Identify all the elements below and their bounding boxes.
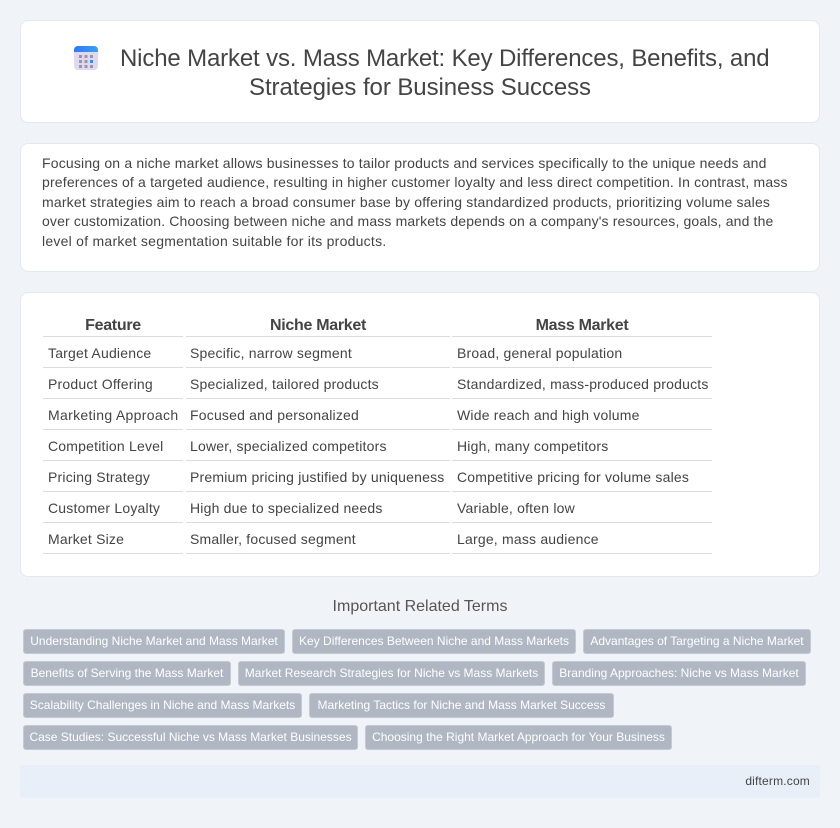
related term tags: Key Differences Between Niche and Mass Markets <box>299 634 569 648</box>
related term tags: Advantages of Targeting a Niche Market <box>590 634 804 648</box>
comparison table: Target Audience <box>48 345 151 361</box>
comparison table: Product Offering <box>48 376 153 392</box>
comparison table: Specific, narrow segment <box>190 345 352 361</box>
related term tags: Case Studies: Successful Niche vs Mass Market Businesses <box>29 730 352 744</box>
related term tags: Marketing Tactics for Niche and Mass Market Success <box>318 698 605 712</box>
intro text: market strategies aim to reach a broad consumer base by offering standardized products, prioritizing volume sales <box>42 194 770 210</box>
related term tags: Understanding Niche Market and Mass Market <box>30 634 278 648</box>
comparison table: Broad, general population <box>457 345 622 361</box>
footer credit: difterm.com <box>745 774 810 788</box>
comparison table: Customer Loyalty <box>48 500 160 516</box>
comparison table: Marketing Approach <box>48 407 178 423</box>
comparison table: Wide reach and high volume <box>457 407 640 423</box>
comparison table: Market Size <box>48 531 124 547</box>
comparison table: Lower, specialized competitors <box>190 438 387 454</box>
intro text: preferences of a targeted audience, resulting in higher customer loyalty and less direct competition. In contrast, mass <box>42 174 788 190</box>
intro text <box>42 155 788 249</box>
comparison table: Competition Level <box>48 438 163 454</box>
comparison table: High due to specialized needs <box>190 500 383 516</box>
related terms heading: Important Related Terms <box>333 598 507 615</box>
comparison table: Focused and personalized <box>190 407 359 423</box>
comparison table: Smaller, focused segment <box>190 531 356 547</box>
intro text: over customization. Choosing between niche and mass markets depends on a company's resources, goals, and the <box>42 213 773 229</box>
comparison table: Pricing Strategy <box>48 469 150 485</box>
comparison table: Premium pricing justified by uniqueness <box>190 469 444 485</box>
header row <box>85 317 628 334</box>
intro card <box>20 143 820 272</box>
table card <box>20 292 820 577</box>
footer bar <box>20 765 820 798</box>
comparison table: Large, mass audience <box>457 531 599 547</box>
related term tags <box>23 629 811 750</box>
header row: Niche Market <box>270 317 366 334</box>
comparison table: Competitive pricing for volume sales <box>457 469 689 485</box>
header card <box>20 20 820 123</box>
title: Niche Market vs. Mass Market: Key Differences, Benefits, and <box>120 45 769 72</box>
related term tags: Scalability Challenges in Niche and Mass Markets <box>30 698 295 712</box>
related term tags: Market Research Strategies for Niche vs Mass Markets <box>245 666 538 680</box>
intro text: Focusing on a niche market allows businesses to tailor products and services specifically to the unique needs and <box>42 155 767 171</box>
intro text: level of market segmentation suitable for its products. <box>42 233 386 249</box>
header row: Feature <box>85 317 141 334</box>
related term tags: Choosing the Right Market Approach for Your Business <box>372 730 665 744</box>
related term tags: Benefits of Serving the Mass Market <box>31 666 223 680</box>
header row: Mass Market <box>536 317 628 334</box>
comparison table: High, many competitors <box>457 438 608 454</box>
title <box>120 45 769 101</box>
comparison table: Standardized, mass-produced products <box>457 376 709 392</box>
icon: calendar grid <box>74 46 98 70</box>
title: Strategies for Business Success <box>249 74 591 101</box>
comparison table: Variable, often low <box>457 500 575 516</box>
comparison table <box>43 317 712 554</box>
comparison table: Specialized, tailored products <box>190 376 379 392</box>
related term tags: Branding Approaches: Niche vs Mass Market <box>559 666 799 680</box>
